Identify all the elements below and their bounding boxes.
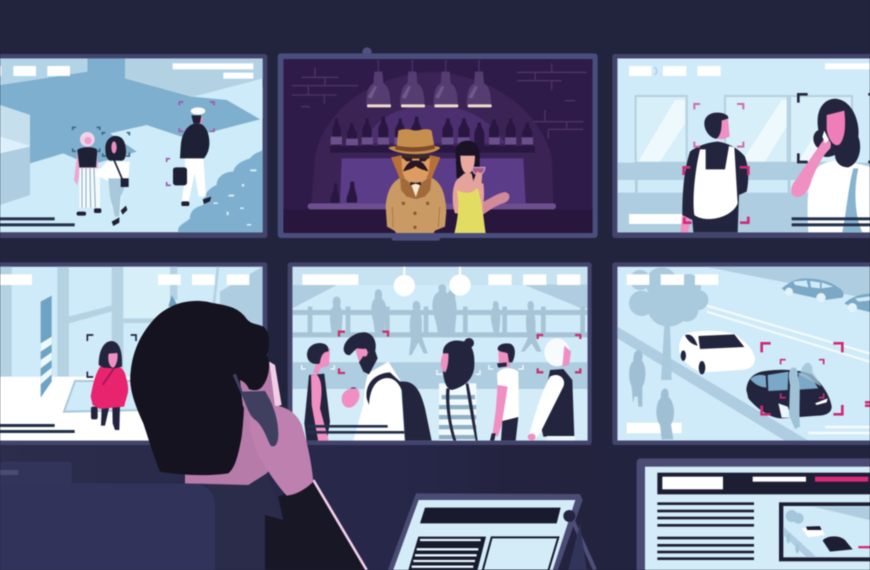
caption lines [308, 425, 404, 434]
panel: road camera feed [612, 262, 870, 445]
caption lines [792, 217, 870, 226]
focus brackets [87, 335, 136, 377]
woman in pink coat [91, 341, 128, 430]
operator: phone [233, 374, 278, 446]
article lines [657, 502, 754, 560]
tree [629, 267, 708, 380]
dark car [746, 363, 832, 429]
status bars [0, 274, 249, 285]
tablet knob [563, 510, 575, 522]
operator: jacket [265, 482, 367, 570]
tablet stand [573, 522, 595, 570]
bush [178, 150, 263, 232]
operator: neck and face [185, 362, 293, 485]
person: short hair in vest [304, 343, 330, 442]
man with white backpack [680, 113, 748, 233]
focus brackets [684, 94, 870, 223]
operator: hair [130, 301, 269, 475]
brick wall [292, 63, 587, 138]
thumbnail [779, 502, 870, 561]
person: woman in striped trousers [74, 132, 101, 216]
striped post [41, 296, 52, 398]
panel: lobby camera feed [0, 262, 267, 445]
pendant lamps [366, 60, 492, 107]
focus brackets [73, 102, 214, 185]
person: woman with bun and striped top [439, 338, 478, 441]
windows [636, 96, 852, 163]
control desk background and operator [0, 301, 367, 570]
operator: hand [250, 406, 313, 496]
panel: bar scene with detective [278, 47, 598, 241]
status bars [0, 63, 253, 79]
focus brackets [762, 343, 870, 414]
focus brackets [302, 332, 580, 374]
parked cars [782, 278, 870, 313]
status bars [629, 63, 870, 224]
panel: street camera feed [0, 54, 267, 238]
operator: ear [240, 380, 250, 410]
monitor: news page [637, 458, 870, 570]
person: woman with shoulder bag [95, 136, 130, 226]
tablet frame [387, 493, 583, 570]
small desk block [0, 462, 72, 488]
person: bearded man with backpack [342, 332, 432, 441]
operator shoulder blocks [0, 483, 215, 570]
background silhouettes and balcony [292, 284, 588, 355]
status bars [302, 274, 580, 285]
tablet screen [392, 500, 575, 570]
panel: crowd camera feed [288, 262, 592, 445]
detective in trench coat [386, 129, 446, 235]
woman on phone [791, 99, 870, 232]
person: white-haired person in vest [528, 338, 575, 441]
person: man in white t-shirt [490, 343, 519, 441]
ceiling lights [394, 267, 471, 296]
woman in yellow dress [453, 141, 509, 233]
person: man with sailor cap [173, 107, 211, 206]
bottles [330, 117, 535, 153]
status bars [627, 274, 718, 433]
white car [679, 331, 755, 374]
road stripes [707, 306, 870, 363]
panel: station camera feed [612, 54, 870, 238]
operator: collar line [313, 480, 367, 570]
pedestrians [629, 350, 674, 439]
tablet on desk [387, 493, 595, 570]
